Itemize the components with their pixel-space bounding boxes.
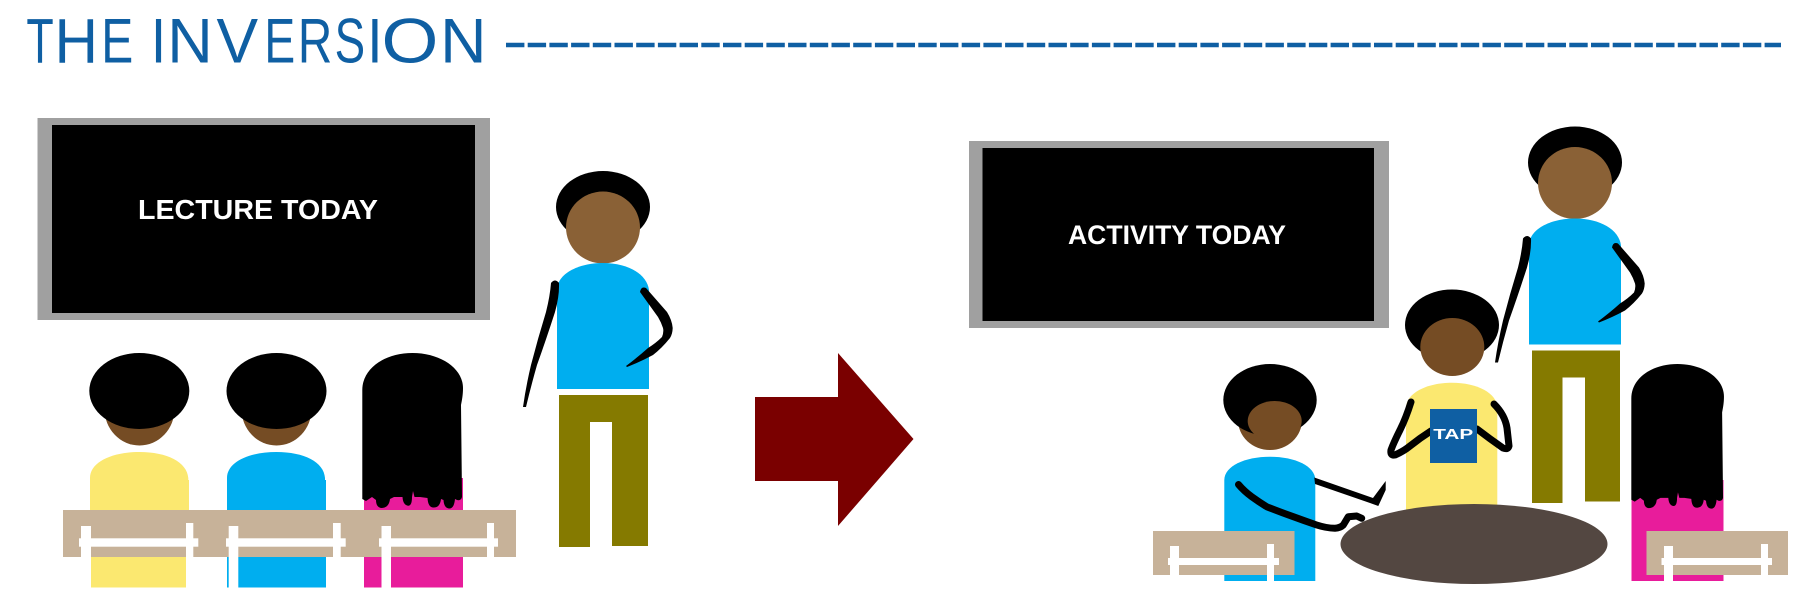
- figures: seated students with bench: [63, 353, 516, 588]
- arm: back: [1314, 478, 1386, 506]
- title: N: [440, 6, 486, 76]
- student: yellow shirt: [89, 353, 189, 588]
- tablet: [1430, 409, 1477, 463]
- table: [1340, 504, 1608, 584]
- screen: lecture today: LECTURE TODAY: [138, 194, 378, 225]
- dashed title rule: [506, 43, 1781, 47]
- screen: activity today: [969, 141, 1389, 328]
- bench: [63, 510, 516, 557]
- bench frame: [1168, 544, 1279, 581]
- title: R: [298, 6, 332, 76]
- title: E: [264, 6, 295, 76]
- title: O: [382, 6, 438, 76]
- screen: lecture today: [38, 118, 490, 320]
- arm: left: [1391, 402, 1431, 455]
- title: E: [101, 6, 133, 76]
- title: H: [54, 6, 98, 76]
- title: V: [216, 6, 258, 76]
- panel: lecture classroom: [38, 118, 673, 588]
- bench frames: [79, 523, 498, 588]
- arrow: [755, 353, 914, 526]
- arm: front: [1238, 484, 1362, 528]
- title: I: [151, 6, 166, 76]
- figure: student holding tablet: [1391, 290, 1509, 512]
- title: S: [335, 6, 365, 76]
- figure: standing teacher: [1495, 126, 1645, 503]
- arm: right: [1477, 404, 1509, 449]
- bench: [1153, 531, 1294, 575]
- title: T: [26, 6, 54, 76]
- screen: activity today: ACTIVITY TODAY: [1068, 220, 1286, 250]
- bench frame: [1662, 544, 1772, 581]
- figure: seated student at left: [1153, 364, 1386, 581]
- title: N: [167, 6, 213, 76]
- figure: teacher: [523, 171, 673, 547]
- student: blue shirt: [226, 353, 326, 588]
- title: I: [367, 6, 382, 76]
- panel: activity classroom: [969, 126, 1788, 584]
- student: pink shirt with long hair: [362, 353, 463, 588]
- figure: seated student at right: [1631, 364, 1788, 581]
- bench: [1646, 531, 1788, 575]
- tablet: TAP: [1433, 427, 1474, 443]
